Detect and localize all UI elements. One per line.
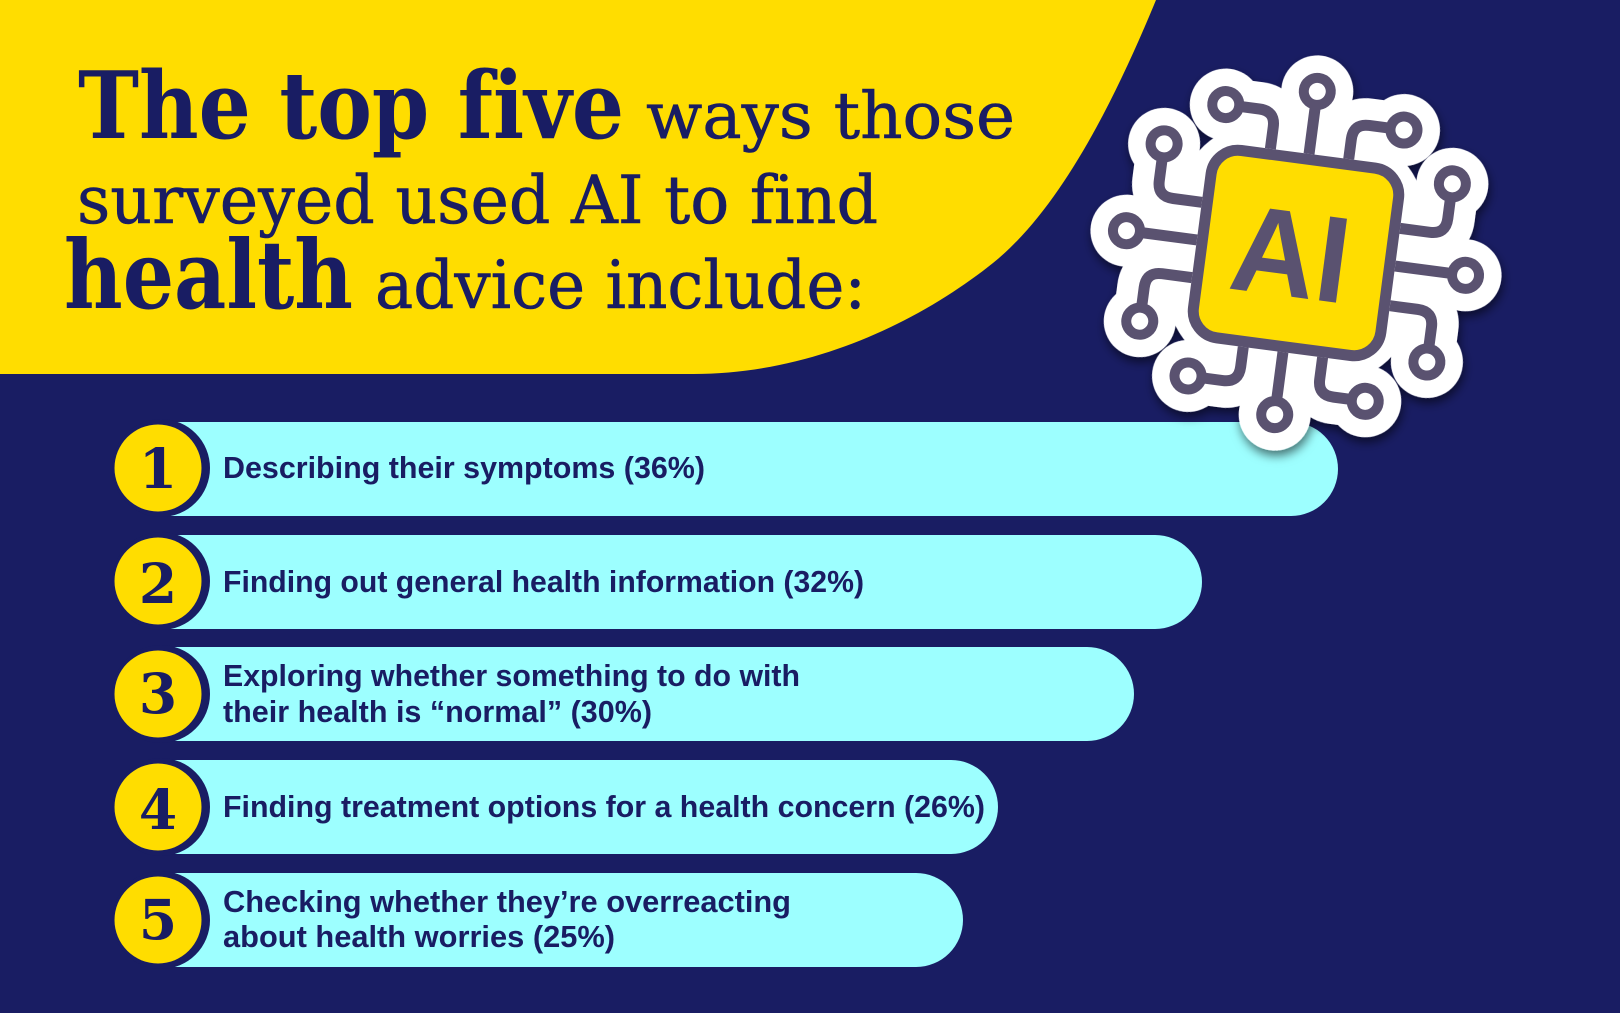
item 2: 2	[139, 551, 177, 616]
item 4	[112, 758, 998, 856]
item 2: Finding out general health information (32%)	[223, 564, 864, 599]
item 1: 1	[139, 436, 177, 501]
chip body	[1190, 147, 1402, 359]
title	[64, 51, 1015, 331]
circuit nodes	[1090, 54, 1502, 452]
title line 1: ways those	[646, 79, 1015, 154]
item 3	[112, 645, 1134, 743]
item 4: Finding treatment options for a health concern (26%)	[223, 789, 985, 824]
item 5: Checking whether they’re overreacting	[223, 884, 791, 919]
title line 1	[78, 51, 1015, 160]
circuit traces	[1105, 69, 1487, 437]
title line 3	[64, 220, 866, 331]
item 3: their health is “normal” (30%)	[223, 694, 652, 729]
item 3: Exploring whether something to do with	[223, 658, 800, 693]
title line 3: health	[64, 220, 353, 331]
title line 1: The top five	[78, 51, 624, 160]
item 4: 4	[139, 777, 177, 842]
item 1: Describing their symptoms (36%)	[223, 450, 705, 485]
title line 2: surveyed used AI to find	[77, 162, 878, 239]
title line 3: advice include:	[375, 247, 866, 324]
ranked list	[112, 419, 1338, 969]
item 5: 5	[139, 887, 177, 952]
item 2	[112, 532, 1202, 630]
item 3: 3	[139, 661, 177, 726]
sticker white backing	[1065, 29, 1527, 477]
item 1	[112, 419, 1338, 517]
item 5	[112, 871, 963, 969]
chip label: AI	[1223, 179, 1358, 330]
yellow header shape	[0, 0, 1156, 374]
icon: AI chip sticker	[1065, 29, 1527, 477]
item 5: about health worries (25%)	[223, 919, 615, 954]
